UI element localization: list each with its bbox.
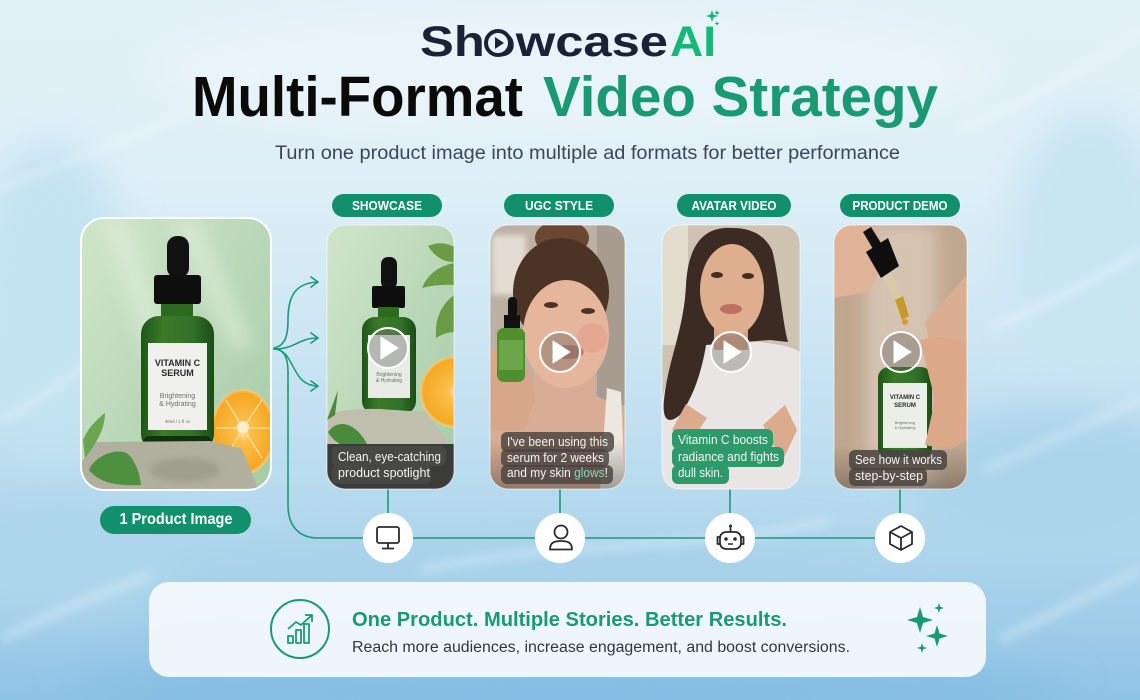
icon: growth chart [271, 600, 329, 658]
illustration: upper hand [834, 225, 886, 298]
panel: bottom takeaway [149, 582, 986, 677]
illustration: bottle [497, 297, 525, 382]
icon: box [875, 513, 925, 563]
illustration: serum bottle: SERUM [161, 368, 194, 378]
illustration: stone plinth [82, 441, 258, 490]
illustration: bottle [362, 257, 416, 414]
caption: I've been using this [507, 435, 608, 449]
illustration: bottle: VITAMIN C [890, 395, 921, 401]
illustration: leaves [83, 413, 141, 485]
caption: Vitamin C boosts [678, 433, 768, 447]
illustration: holding hand [920, 337, 967, 450]
illustration: bottle: Brightening [376, 372, 402, 378]
heading: takeaway: One Product. Multiple Stories. Better Results. [352, 609, 787, 631]
illustration: orange [420, 356, 454, 428]
illustration: hands [672, 404, 797, 462]
panel: showcase video [327, 225, 454, 489]
illustration: bottle: SERUM [894, 403, 916, 409]
logo: ShowcaseAI: AI [670, 18, 716, 66]
caption: serum for 2 weeks [507, 451, 604, 465]
caption: radiance and fights [678, 450, 779, 464]
illustration: face [523, 280, 609, 388]
label pill: AVATAR VIDEO: AVATAR VIDEO [692, 198, 776, 213]
panel: source product image [80, 217, 275, 491]
panel: UGC style video [490, 220, 625, 489]
card outlines [327, 225, 967, 489]
label pill: UGC STYLE: UGC STYLE [525, 198, 593, 213]
label pill: PRODUCT DEMO [840, 194, 960, 217]
illustration: bottle: & Hydrating [376, 378, 402, 384]
illustration: bottle: & Hydrating [895, 425, 915, 430]
caption: and my skin glows! [507, 466, 608, 480]
logo: ShowcaseAI: Showcase [420, 18, 668, 66]
illustration: hair [664, 228, 788, 420]
title: Video Strategy [543, 65, 938, 129]
panel: product demo video [834, 225, 967, 489]
illustration: t-shirt [662, 342, 800, 489]
label pill: UGC STYLE [504, 194, 614, 217]
illustration: neck and chest [490, 370, 625, 489]
label: 1 Product Image [100, 506, 251, 534]
illustration: face and neck [700, 244, 764, 350]
icon: monitor [363, 513, 413, 563]
title [192, 65, 938, 129]
icon: orange slice [212, 389, 270, 474]
illustration: serum bottle: 30ml / 1 fl oz [165, 419, 191, 424]
label pill: SHOWCASE [332, 194, 442, 217]
caption [672, 429, 784, 484]
illustration: dropper [863, 227, 909, 325]
illustration: serum bottle: VITAMIN C [155, 358, 201, 368]
caption: dull skin. [678, 466, 723, 480]
icon: play button showcase [368, 328, 408, 368]
illustration: leaves [422, 243, 454, 338]
panel: avatar video [662, 225, 800, 489]
illustration: serum bottle: Brightening [160, 393, 195, 400]
caption [501, 432, 614, 484]
logo: ShowcaseAI [420, 10, 720, 66]
illustration: serum bottle: & Hydrating [159, 401, 196, 408]
illustration: hair [513, 225, 609, 326]
subtitle: Turn one product image into multiple ad formats for better performance [275, 143, 900, 164]
icon: person [535, 513, 585, 563]
icon: sparkles [907, 603, 948, 653]
caption [332, 446, 446, 484]
illustration: leaves low [327, 390, 367, 447]
illustration: top strap [600, 388, 625, 489]
connector arrows: product image to formats [274, 277, 900, 538]
label: 1 Product Image: 1 Product Image [120, 511, 233, 528]
caption: product spotlight [338, 466, 431, 480]
label pill: SHOWCASE: SHOWCASE [352, 198, 422, 213]
illustration: bottle: Brightening [895, 420, 915, 425]
illustration: hand [490, 349, 535, 430]
caption [849, 450, 947, 486]
illustration: arm [925, 275, 967, 345]
icon: play button avatar [711, 332, 751, 372]
caption: step-by-step [855, 469, 923, 483]
caption: Clean, eye-catching [338, 450, 441, 464]
text: takeaway detail: Reach more audiences, increase engagement, and boost conversions. [352, 639, 850, 656]
illustration: serum bottle [141, 236, 214, 452]
label pill: AVATAR VIDEO [677, 194, 791, 217]
icon: play button demo [881, 332, 921, 372]
title: Multi-Format [192, 65, 523, 129]
caption: See how it works [855, 453, 942, 467]
icon: play button UGC [540, 332, 580, 372]
illustration: stone [327, 408, 447, 444]
icon: robot [705, 513, 755, 563]
illustration: bottle [878, 367, 932, 459]
label pill: PRODUCT DEMO: PRODUCT DEMO [852, 198, 948, 213]
